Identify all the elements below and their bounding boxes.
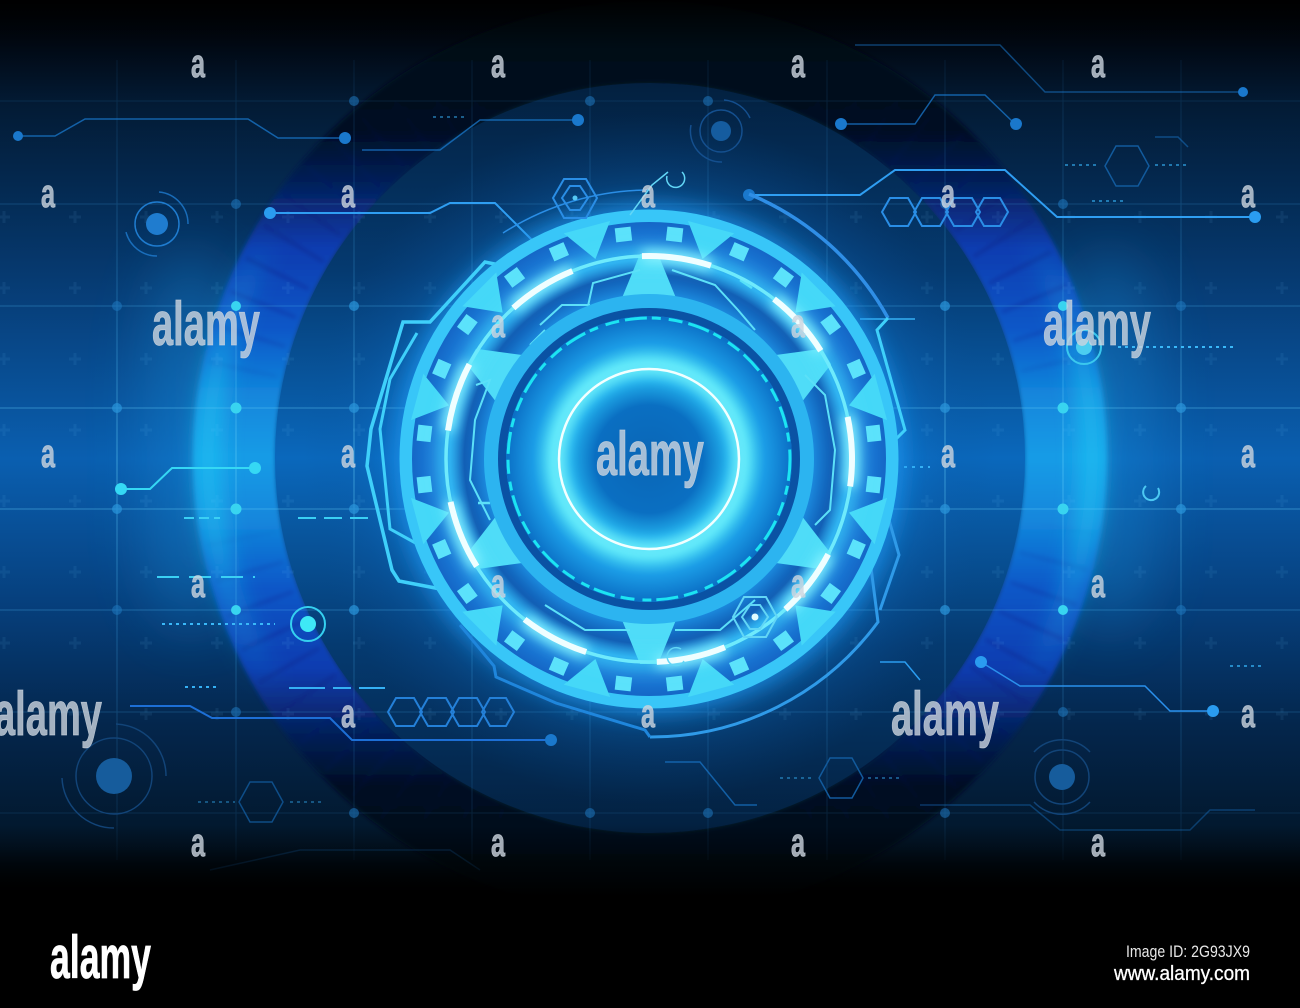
bright segmented ring: [439, 249, 859, 669]
small watermark letters: a: [641, 692, 655, 736]
light band around core: [492, 302, 806, 616]
glowing inner ring halo: [557, 367, 741, 551]
small watermark letters: a: [491, 42, 505, 86]
icon: target bottom left: [62, 724, 166, 828]
small watermark letters: a: [491, 302, 505, 346]
hexagon chain top right: [882, 198, 1008, 226]
outer gear teeth: [411, 221, 887, 697]
inner gear teeth: [458, 254, 840, 664]
gear squares: [417, 227, 881, 691]
small watermark letters: a: [491, 562, 505, 606]
small watermark letters: a: [1241, 692, 1255, 736]
small watermark letters: a: [1241, 172, 1255, 216]
ambient side glows: [145, 250, 1155, 630]
small watermark letters: a: [941, 432, 955, 476]
small watermark letters: a: [341, 692, 355, 736]
footer logo: alamy: [50, 924, 151, 991]
small watermark letters: a: [341, 172, 355, 216]
segmented ring soft glow: [446, 256, 852, 662]
icon: target bottom right: [1034, 740, 1090, 814]
inner large disc: [275, 83, 1025, 833]
core disc: [506, 316, 792, 602]
dashed accents: [157, 117, 1262, 802]
icon: small arc right: [1143, 486, 1159, 500]
large ring bright edge: [208, 16, 1092, 900]
small watermark letters: a: [1241, 432, 1255, 476]
outer light band: [407, 217, 891, 701]
small watermark letters: a: [791, 821, 805, 865]
hexagon chain bottom left: [388, 698, 514, 726]
footer url: www.alamy.com: [1113, 963, 1250, 985]
glowing inner ring: [559, 369, 739, 549]
large watermarks: alamy: [1043, 290, 1151, 359]
dark gear band and inner band: [456, 266, 842, 652]
single hexagons: [239, 146, 1149, 822]
outer HUD outlines: [367, 190, 905, 737]
small watermark letters: a: [1091, 821, 1105, 865]
small hexagon top: [553, 179, 597, 218]
icon: target top centre: [690, 100, 750, 162]
large outer ring: [234, 42, 1066, 874]
thin segmented ring base: [446, 256, 852, 662]
small watermark letters: a: [791, 562, 805, 606]
small watermark letters: a: [341, 432, 355, 476]
circuit traces: [18, 45, 1255, 870]
inner HUD traces: [470, 270, 835, 630]
faint plus pattern: [0, 180, 1300, 740]
central HUD gear: [367, 172, 905, 737]
dark band around core: [502, 312, 796, 606]
footer image id: Image ID: 2G93JX9: [1126, 942, 1250, 961]
small watermark letters: a: [791, 42, 805, 86]
large watermarks: alamy: [891, 680, 999, 749]
gear soft halo: [394, 204, 904, 714]
small arcs: [630, 172, 685, 666]
small watermark letters: a: [491, 821, 505, 865]
icon: target top left: [126, 192, 188, 256]
bright segmented ring glow: [439, 249, 859, 669]
icon: bright target right: [1067, 330, 1101, 364]
small watermark letters: a: [641, 172, 655, 216]
small watermark letters: a: [1091, 42, 1105, 86]
small watermark letters: a: [191, 562, 205, 606]
large watermarks: alamy: [152, 290, 260, 359]
small watermark letters: a: [1091, 562, 1105, 606]
dashed cyan ring: [508, 318, 790, 600]
circuit end nodes: [13, 87, 1261, 746]
small hexagon bottom: [733, 597, 777, 637]
large watermarks: alamy: [596, 420, 704, 489]
large watermarks: [0, 290, 1151, 749]
icon: bright target left: [291, 607, 325, 641]
small watermark letters: a: [41, 172, 55, 216]
small watermark letters: [41, 42, 1255, 865]
grid lines and nodes: [0, 60, 1300, 860]
small watermark letters: a: [791, 302, 805, 346]
small watermark letters: a: [41, 432, 55, 476]
small watermark letters: a: [191, 821, 205, 865]
small watermark letters: a: [191, 42, 205, 86]
small watermark letters: a: [941, 172, 955, 216]
